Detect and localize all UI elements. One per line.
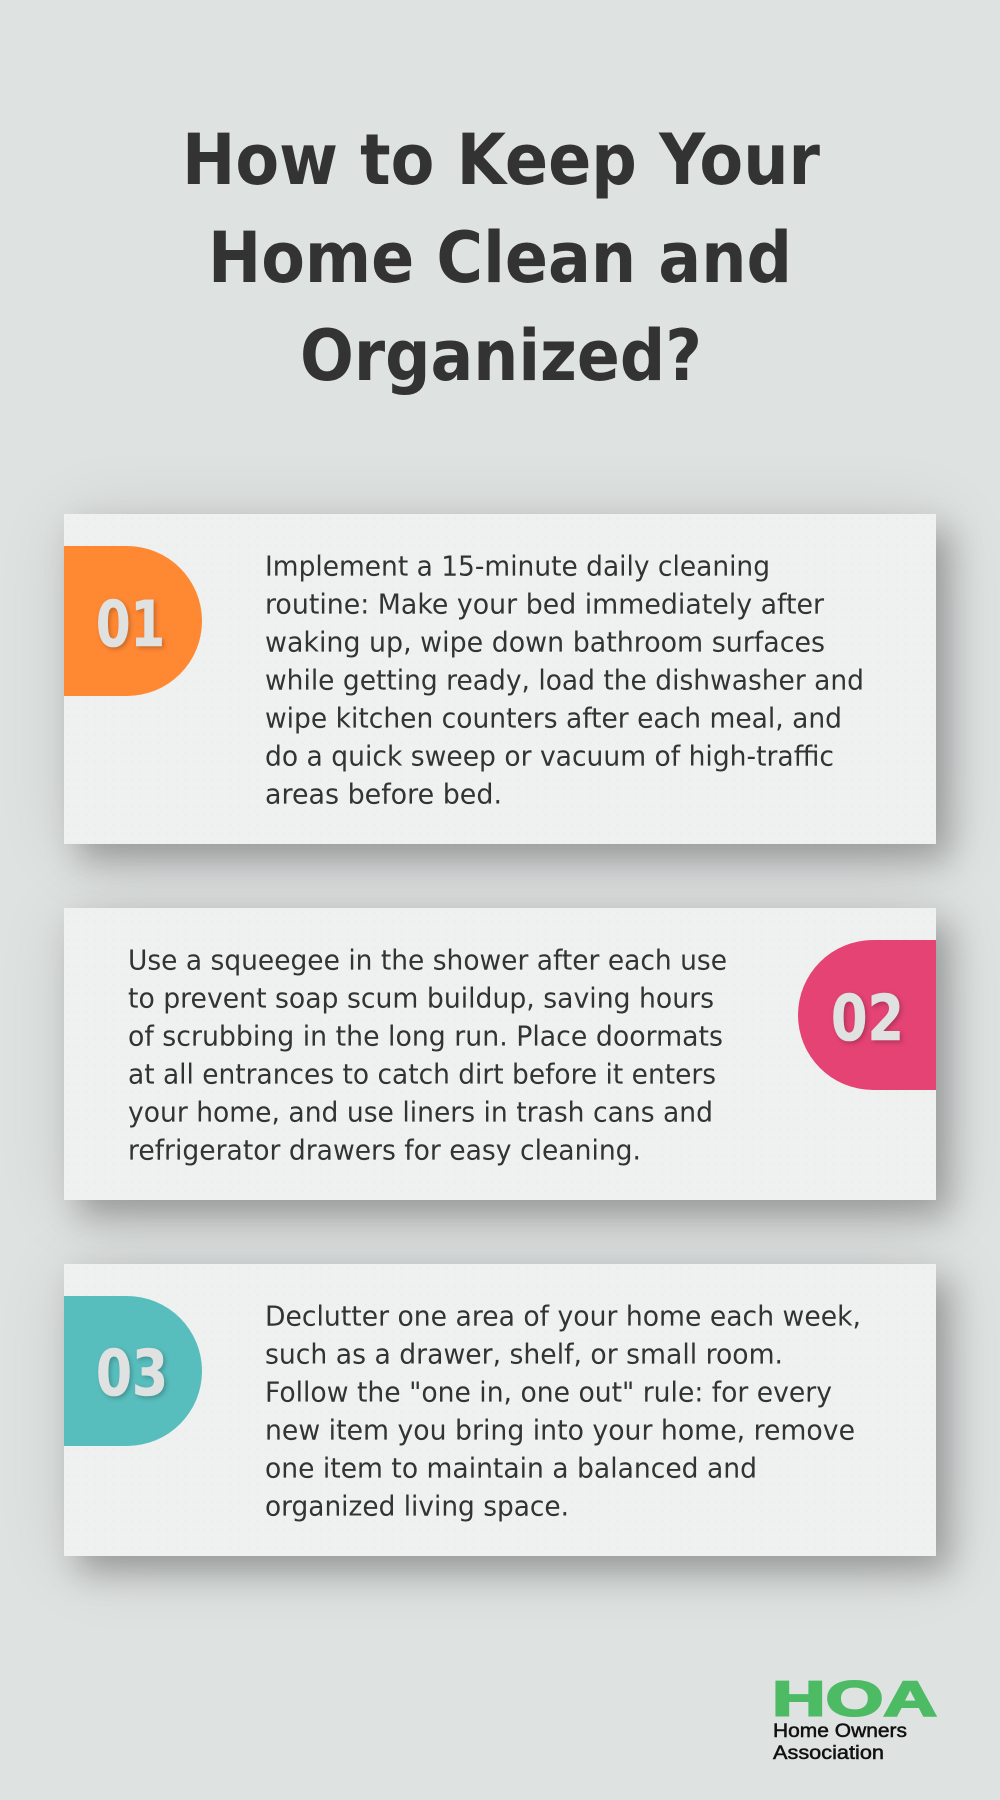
text block: step 03: one item to maintain a balanced and <box>265 1452 757 1484</box>
text block: step 02: Use a squeegee in the shower after each use <box>128 944 727 976</box>
text block: step 03: Follow the "one in, one out" rule: for every <box>265 1376 832 1408</box>
logo: HOA Home Owners Association: Home Owners <box>773 1721 907 1742</box>
text block: step 01: waking up, wipe down bathroom surfaces <box>265 626 825 658</box>
badge: step 03: 03 <box>96 1337 168 1410</box>
text block: step 02 <box>128 944 727 1166</box>
badge: step 02: 02 <box>831 982 904 1055</box>
text block: step 03: organized living space. <box>265 1490 569 1522</box>
logo: HOA Home Owners Association: Association <box>773 1743 884 1764</box>
text block: step 01 <box>265 550 864 810</box>
text block: step 01: Implement a 15-minute daily cleaning <box>265 550 770 582</box>
title: How to Keep Your <box>182 119 820 201</box>
panel: step 02 <box>64 908 936 1200</box>
badge: step 02 <box>798 940 936 1090</box>
title: Organized? <box>300 315 702 397</box>
text block: step 01: routine: Make your bed immediately after <box>265 588 825 620</box>
text block: step 01: while getting ready, load the dishwasher and <box>265 664 864 696</box>
title <box>182 119 820 397</box>
panel: step 03 <box>64 1264 936 1556</box>
title: Home Clean and <box>208 217 792 299</box>
text block: step 02: of scrubbing in the long run. Place doormats <box>128 1020 723 1052</box>
panel: step 01 <box>64 514 936 844</box>
badge: step 01: 01 <box>96 588 165 661</box>
text block: step 01: areas before bed. <box>265 778 502 810</box>
text block: step 03: such as a drawer, shelf, or small room. <box>265 1338 783 1370</box>
text block: step 01: wipe kitchen counters after each meal, and <box>265 702 842 734</box>
text block: step 03: Declutter one area of your home each week, <box>265 1300 861 1332</box>
text block: step 02: at all entrances to catch dirt before it enters <box>128 1058 716 1090</box>
badge: step 01 <box>64 546 202 696</box>
text block: step 02: to prevent soap scum buildup, saving hours <box>128 982 714 1014</box>
text block: step 03 <box>265 1300 861 1522</box>
logo: HOA Home Owners Association: HOA <box>772 1672 937 1726</box>
text block: step 02: refrigerator drawers for easy cleaning. <box>128 1134 641 1166</box>
badge: step 03 <box>64 1296 202 1446</box>
text block: step 01: do a quick sweep or vacuum of high-traffic <box>265 740 834 772</box>
logo: HOA Home Owners Association <box>772 1672 938 1764</box>
text block: step 03: new item you bring into your home, remove <box>265 1414 855 1446</box>
text block: step 02: your home, and use liners in trash cans and <box>128 1096 713 1128</box>
